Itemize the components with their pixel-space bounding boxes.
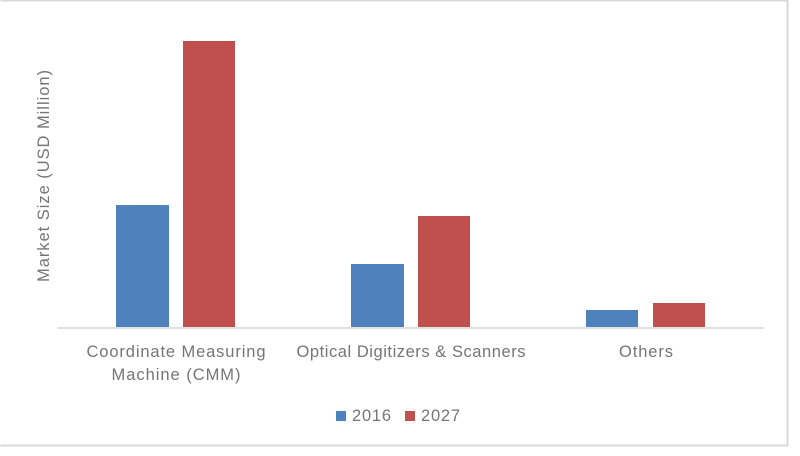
- category label: CMM: Machine (CMM): [112, 366, 240, 384]
- category label: CMM: Coordinate Measuring: [86, 343, 266, 361]
- legend: [336, 407, 460, 425]
- bar: CMM 2027: [183, 41, 235, 328]
- bar: Optical 2016: [351, 264, 404, 328]
- bar chart: [58, 41, 764, 329]
- category label: CMM: [86, 343, 266, 384]
- bar: Others 2016: [586, 310, 638, 328]
- bar: CMM 2016: [116, 205, 169, 328]
- bar: Others 2027: [653, 303, 705, 328]
- x axis line: [58, 327, 764, 329]
- bar: Optical 2027: [418, 216, 470, 328]
- legend: 2016: 2016: [352, 407, 391, 425]
- category label: Others: Others: [619, 343, 673, 361]
- category label: Optical: Optical Digitizers & Scanners: [296, 343, 526, 361]
- legend: 2027: 2027: [421, 407, 460, 425]
- y-axis title: Market Size (USD Million): [35, 70, 53, 282]
